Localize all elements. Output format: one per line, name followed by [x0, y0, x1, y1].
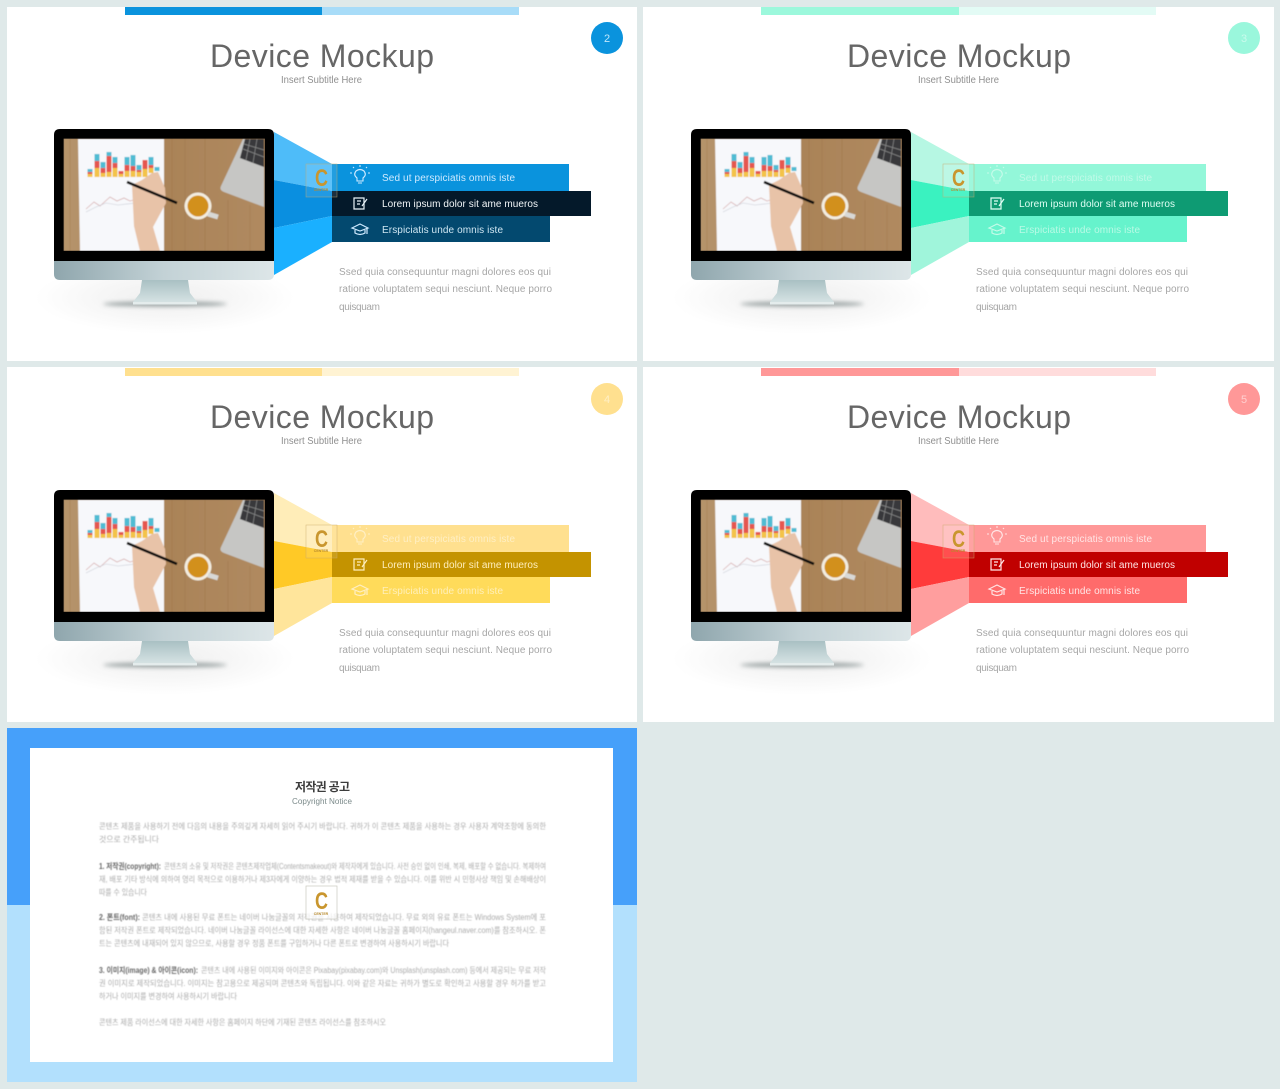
logo watermark: CENTER [314, 912, 329, 916]
logo watermark: CENTER [951, 549, 966, 553]
icon: note [354, 559, 367, 570]
page number badge [1228, 22, 1260, 54]
list text: Lorem ipsum dolor sit ame mueros [382, 199, 538, 210]
paragraph [339, 267, 552, 313]
page number badge: 2 [604, 33, 610, 45]
notice section 1: 콘텐츠의 소유 및 저작권은 콘텐츠제작업체(Contentsmakeout)와 제작자에게 있습니다. 사전 승인 없이 인쇄, 복제, 배포할 수 없습니다. 복제하여 [164, 861, 546, 871]
paragraph [976, 267, 1189, 313]
paragraph: ratione voluptatem sequi nesciunt. Neque porro [976, 284, 1189, 295]
monitor image [672, 490, 932, 695]
logo watermark: CENTER [314, 549, 329, 553]
notice intro: 콘텐츠 제품을 사용하기 전에 다음의 내용을 주의깊게 자세히 읽어 주시기 바랍니다. 귀하가 이 콘텐츠 제품을 사용하는 경우 사용자 계약조항에 동의한 [99, 821, 547, 831]
paragraph: ratione voluptatem sequi nesciunt. Neque porro [976, 645, 1189, 656]
subtitle: Insert Subtitle Here [281, 75, 362, 86]
notice intro [99, 821, 547, 844]
page number badge [591, 383, 623, 415]
page number badge: 3 [1241, 33, 1247, 45]
list text [382, 173, 538, 236]
logo watermark: C [315, 526, 328, 553]
logo watermark: C [952, 165, 965, 192]
notice section 1 [99, 861, 546, 897]
notice section 2: 2. 폰트(font): [99, 913, 140, 922]
logo watermark: C [315, 888, 328, 915]
list text [1019, 173, 1175, 236]
panel: device mockup green [643, 7, 1274, 361]
list text: Sed ut perspiciatis omnis iste [382, 534, 515, 545]
paragraph: Ssed quia consequuntur magni dolores eos qui [976, 628, 1188, 639]
logo watermark: C [315, 165, 328, 192]
icon: light bulb [987, 526, 1007, 544]
page number badge: 4 [604, 394, 610, 406]
list text: Sed ut perspiciatis omnis iste [382, 173, 515, 184]
paragraph: quisquam [339, 302, 380, 313]
logo watermark: C [952, 526, 965, 553]
notice subtitle: Copyright Notice [292, 796, 352, 806]
title: Device Mockup [847, 399, 1071, 435]
notice section 3: 콘텐츠 내에 사용된 이미지와 아이콘은 Pixabay(pixabay.com)와 Unsplash(unsplash.com) 등에서 제공되는 무료 저작 [201, 965, 547, 975]
top colour bar [761, 368, 1156, 376]
paragraph: Ssed quia consequuntur magni dolores eos qui [976, 267, 1188, 278]
panel: device mockup yellow [7, 367, 637, 722]
list text: Sed ut perspiciatis omnis iste [1019, 173, 1152, 184]
logo watermark [306, 525, 337, 558]
list text: Erspiciatis unde omnis iste [382, 225, 503, 236]
panel: device mockup blue [7, 7, 637, 361]
top colour bar [125, 368, 519, 376]
icon: note [991, 198, 1004, 209]
list text: Lorem ipsum dolor sit ame mueros [1019, 560, 1175, 571]
list bars [332, 525, 591, 603]
icon: note [354, 198, 367, 209]
paragraph [339, 628, 552, 674]
funnel [911, 132, 969, 275]
notice section 1: 따를 수 있습니다 [99, 887, 148, 897]
paragraph: quisquam [976, 663, 1017, 674]
list bars [969, 525, 1228, 603]
paragraph: Ssed quia consequuntur magni dolores eos qui [339, 267, 551, 278]
notice title: 저작권 공고 [295, 779, 350, 794]
notice section 2: 함된 저작권 폰트로 제작되었습니다. 네이버 나눔글꼴 라이선스에 대한 자세한 사항은 네이버 나눔글꼴 홈페이지(hangeul.naver.com)를 참조하시오. 폰 [99, 925, 546, 935]
title: Device Mockup [210, 399, 434, 435]
list text: Lorem ipsum dolor sit ame mueros [1019, 199, 1175, 210]
notice section 2 [99, 912, 546, 948]
icon: graduation cap [989, 585, 1005, 596]
logo watermark [943, 525, 974, 558]
notice section 3: 하거나 이미지를 변경하여 사용하시기 바랍니다 [99, 991, 238, 1001]
list text: Sed ut perspiciatis omnis iste [1019, 534, 1152, 545]
panel: device mockup red [643, 367, 1274, 722]
icon: note [991, 559, 1004, 570]
icon: graduation cap [352, 585, 368, 596]
subtitle: Insert Subtitle Here [281, 436, 362, 447]
list text [382, 534, 538, 597]
list text: Lorem ipsum dolor sit ame mueros [382, 560, 538, 571]
paragraph: ratione voluptatem sequi nesciunt. Neque porro [339, 645, 552, 656]
notice section 1: 재, 배포 기타 방식에 의하여 영리 목적으로 이용하거나 제3자에게 이양하는 경우 법적 제재를 받을 수 있습니다. 이를 위반 시 민형사상 책임 및 손해배상이 [99, 874, 546, 884]
logo watermark [306, 164, 337, 197]
notice section 1: 1. 저작권(copyright): [99, 861, 161, 871]
logo watermark: CENTER [314, 188, 329, 192]
funnel [274, 132, 332, 275]
paragraph: Ssed quia consequuntur magni dolores eos qui [339, 628, 551, 639]
page number badge [1228, 383, 1260, 415]
list bars [332, 164, 591, 242]
notice section 3: 3. 이미지(image) & 아이콘(icon): [99, 965, 198, 975]
subtitle: Insert Subtitle Here [918, 436, 999, 447]
top colour bar [125, 7, 519, 15]
notice section 3 [99, 965, 547, 1001]
notice footer line: 콘텐츠 제품 라이선스에 대한 자세한 사항은 홈페이지 하단에 기재된 콘텐츠 라이선스를 참조하시오 [99, 1017, 386, 1027]
page number badge [591, 22, 623, 54]
title: Device Mockup [847, 38, 1071, 74]
icon: light bulb [350, 526, 370, 544]
notice section 3: 권 이미지로 제작되었습니다. 이미지는 참고용으로 제공되며 콘텐츠와 독립됩니다. 이와 같은 자료는 귀하가 별도로 확인하고 사용할 경우 허가를 받고 [99, 978, 546, 988]
funnel [274, 493, 332, 636]
icon: graduation cap [352, 224, 368, 234]
logo watermark [943, 164, 974, 197]
monitor image [672, 129, 932, 334]
icon: light bulb [987, 165, 1007, 183]
panel: copyright notice [7, 728, 637, 1082]
logo watermark: CENTER [951, 188, 966, 192]
paragraph: quisquam [976, 302, 1017, 313]
notice intro: 것으로 간주됩니다 [99, 834, 160, 844]
icon: graduation cap [989, 224, 1005, 234]
notice section 2: 트는 콘텐츠에 내재되어 있지 않으므로, 사용할 경우 정품 폰트를 구입하거나 다른 폰트로 변경하여 사용하시기 바랍니다 [99, 938, 450, 948]
logo watermark [306, 886, 337, 919]
title: Device Mockup [210, 38, 434, 74]
paragraph: ratione voluptatem sequi nesciunt. Neque porro [339, 284, 552, 295]
icon: light bulb [350, 165, 370, 183]
list text: Erspiciatis unde omnis iste [1019, 586, 1140, 597]
funnel [911, 493, 969, 636]
notice section 2: 콘텐츠 내에 사용된 무료 폰트는 네이버 나눔글꼴의 저작권을 사용하여 제작되었습니다. 무료 외의 유료 폰트는 Windows System에 포 [142, 912, 546, 922]
list text: Erspiciatis unde omnis iste [382, 586, 503, 597]
page number badge: 5 [1241, 394, 1247, 406]
top colour bar [761, 7, 1156, 15]
subtitle: Insert Subtitle Here [918, 75, 999, 86]
paragraph: quisquam [339, 663, 380, 674]
monitor image [35, 129, 295, 334]
monitor image [35, 490, 295, 695]
list text [1019, 534, 1175, 597]
list bars [969, 164, 1228, 242]
paragraph [976, 628, 1189, 674]
list text: Erspiciatis unde omnis iste [1019, 225, 1140, 236]
